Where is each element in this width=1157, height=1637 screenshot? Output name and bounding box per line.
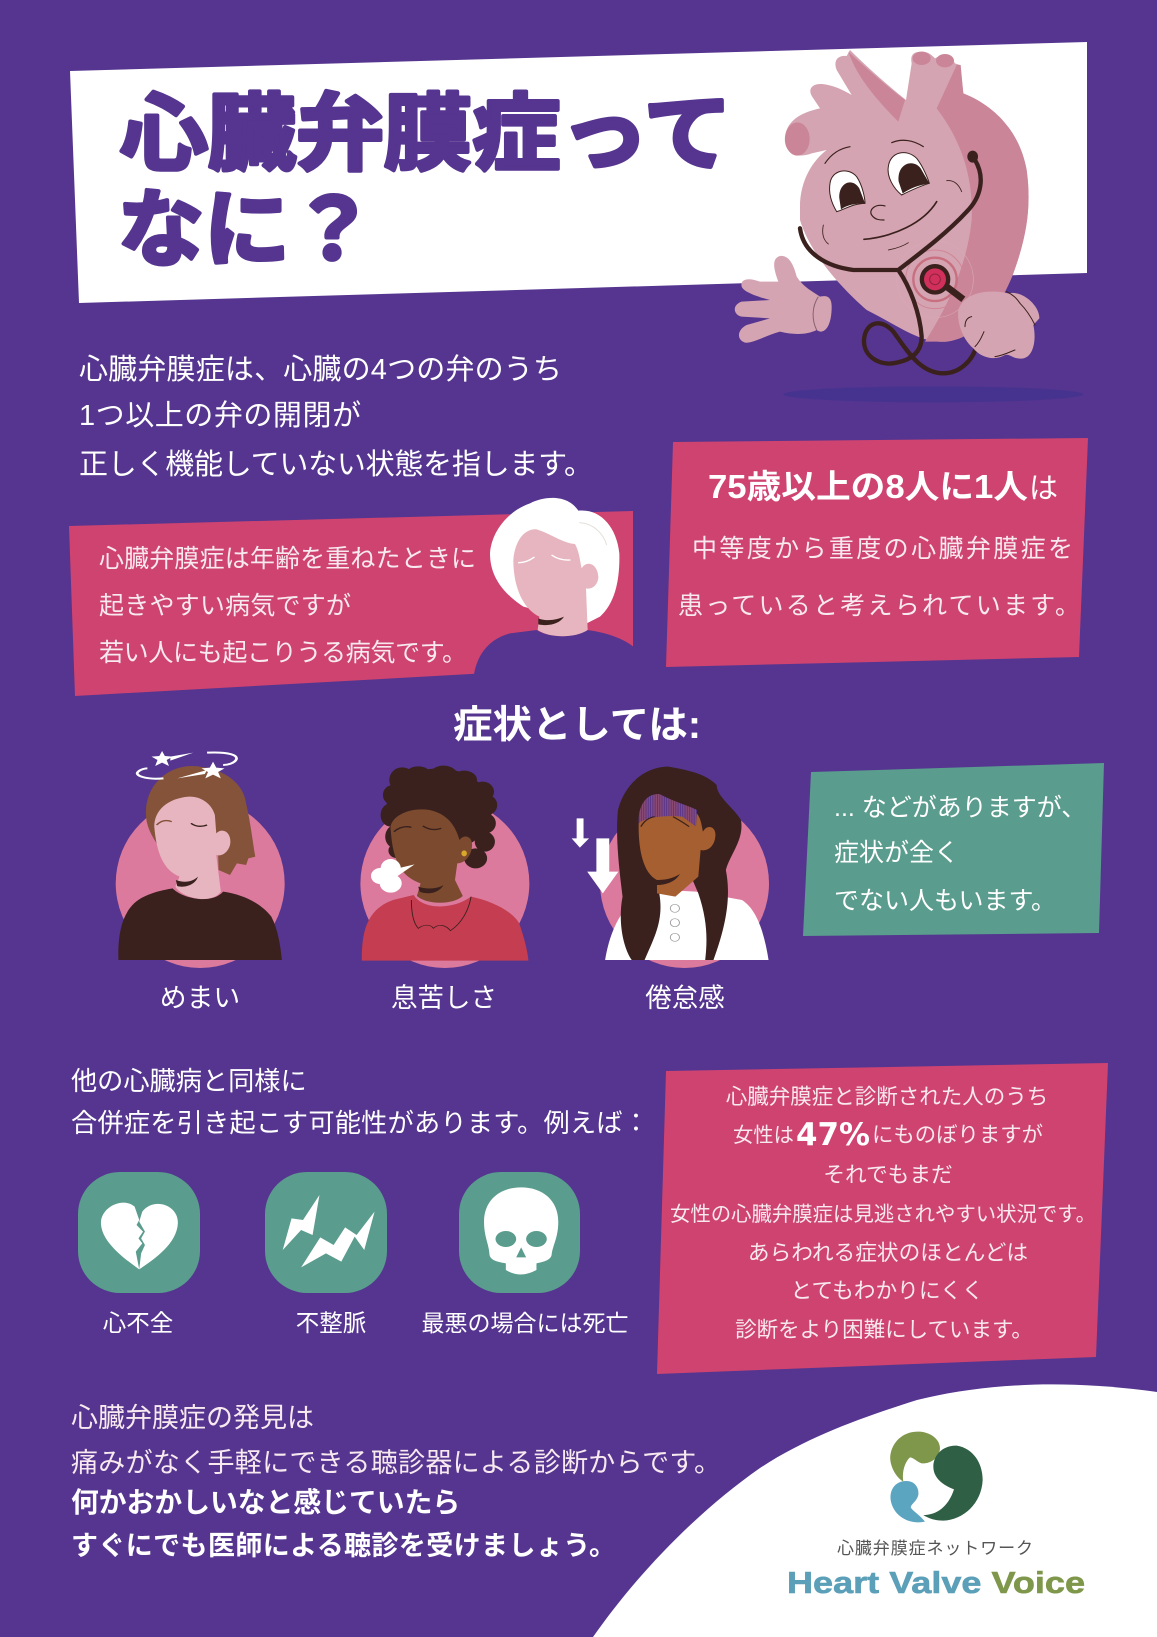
text block: complications intro: 他の心臓病と同様に bbox=[71, 1066, 307, 1096]
text block: age callout text: 心臓弁膜症は年齢を重ねたときに bbox=[99, 545, 476, 573]
text block: diagnosis message: 何かおかしいなと感じていたら bbox=[71, 1487, 460, 1518]
label: dizziness: めまい bbox=[160, 983, 240, 1013]
text block: statistic text: 中等度から重度の心臓弁膜症を bbox=[692, 535, 1073, 563]
icon: arrhythmia bolts bbox=[265, 1172, 387, 1293]
text block: age callout text bbox=[99, 545, 476, 667]
text block: statistic text: は bbox=[1029, 473, 1058, 505]
icon: Heart Valve Voice logo bbox=[890, 1432, 983, 1522]
text block: women statistic text: 女性は bbox=[733, 1124, 794, 1147]
text block: statistic text: 75歳以上の8人に1人 bbox=[708, 468, 1028, 505]
panel: logo corner bbox=[593, 1384, 1157, 1637]
label: fatigue: 倦怠感 bbox=[645, 983, 725, 1013]
label: breathlessness: 息苦しさ bbox=[391, 983, 497, 1013]
icon: skull bbox=[459, 1172, 580, 1293]
illustration: breathlessness person bbox=[360, 766, 529, 968]
text block: note text: でない人もいます。 bbox=[834, 887, 1056, 915]
text block: note text bbox=[834, 794, 1086, 915]
panel: age callout bbox=[69, 511, 633, 696]
text block: women statistic text: にものぼりますが bbox=[872, 1123, 1043, 1147]
logo text: Japanese name: 心臓弁膜症ネットワーク bbox=[837, 1539, 1033, 1558]
text block: diagnosis message: 痛みがなく手軽にできる聴診器による診断からです。 bbox=[71, 1448, 721, 1478]
text block: statistic text: 患っていると考えられています。 bbox=[678, 592, 1080, 620]
text block: women statistic text: 女性の心臓弁膜症は見逃されやすい状況です。 bbox=[670, 1203, 1096, 1226]
text block: age callout text: 起きやすい病気ですが bbox=[99, 592, 351, 620]
label: heart failure: 心不全 bbox=[103, 1310, 173, 1336]
icon: elderly person bbox=[473, 498, 657, 680]
text block: women statistic text: 47% bbox=[796, 1117, 870, 1153]
text block: note text: 症状が全く bbox=[834, 839, 959, 867]
text block: introduction: 正しく機能していない状態を指します。 bbox=[79, 448, 593, 481]
text block: note text: ... などがありますが、 bbox=[834, 794, 1086, 822]
illustration: dizziness person bbox=[116, 751, 285, 968]
text block: women statistic text bbox=[670, 1085, 1096, 1342]
text block: introduction: 1つ以上の弁の開閉が bbox=[79, 399, 361, 432]
label: arrhythmia: 不整脈 bbox=[296, 1310, 366, 1336]
illustration: fatigue person bbox=[572, 767, 769, 968]
panel: women statistic bbox=[657, 1063, 1108, 1374]
text block: statistic text bbox=[678, 468, 1080, 620]
text block: women statistic text: とてもわかりにくく bbox=[790, 1278, 984, 1303]
panel: title banner bbox=[70, 42, 1087, 303]
title: 心臓弁膜症って bbox=[120, 87, 732, 181]
text block: diagnosis message: すぐにでも医師による聴診を受けましょう。 bbox=[71, 1531, 616, 1561]
icon: broken heart bbox=[78, 1172, 200, 1293]
heading: symptoms: 症状としては: bbox=[453, 704, 701, 747]
logo text: Heart Valve Voice: Heart Valve Voice bbox=[787, 1565, 1085, 1600]
text block: age callout text: 若い人にも起こりうる病気です。 bbox=[99, 639, 467, 667]
text block: introduction: 心臓弁膜症は、心臓の4つの弁のうち bbox=[79, 353, 562, 386]
title: なに？ bbox=[118, 183, 376, 277]
text block: complications intro: 合併症を引き起こす可能性があります。例えば： bbox=[71, 1108, 649, 1138]
panel: statistic callout bbox=[666, 438, 1088, 667]
text block: women statistic text: あらわれる症状のほとんどは bbox=[748, 1240, 1028, 1265]
title bbox=[118, 87, 732, 277]
text block: complications intro bbox=[71, 1066, 649, 1138]
text block: introduction bbox=[79, 353, 593, 481]
panel: note on symptoms bbox=[803, 763, 1104, 936]
text block: women statistic text: 心臓弁膜症と診断された人のうち bbox=[726, 1085, 1048, 1109]
text block: diagnosis message: 心臓弁膜症の発見は bbox=[71, 1403, 314, 1433]
icon: heart mascot with stethoscope bbox=[735, 50, 1083, 402]
text block: diagnosis message bbox=[71, 1403, 721, 1561]
text block: women statistic text: 診断をより困難にしています。 bbox=[735, 1318, 1033, 1342]
label: death: 最悪の場合には死亡 bbox=[422, 1310, 628, 1336]
text block: women statistic text: それでもまだ bbox=[823, 1162, 953, 1187]
